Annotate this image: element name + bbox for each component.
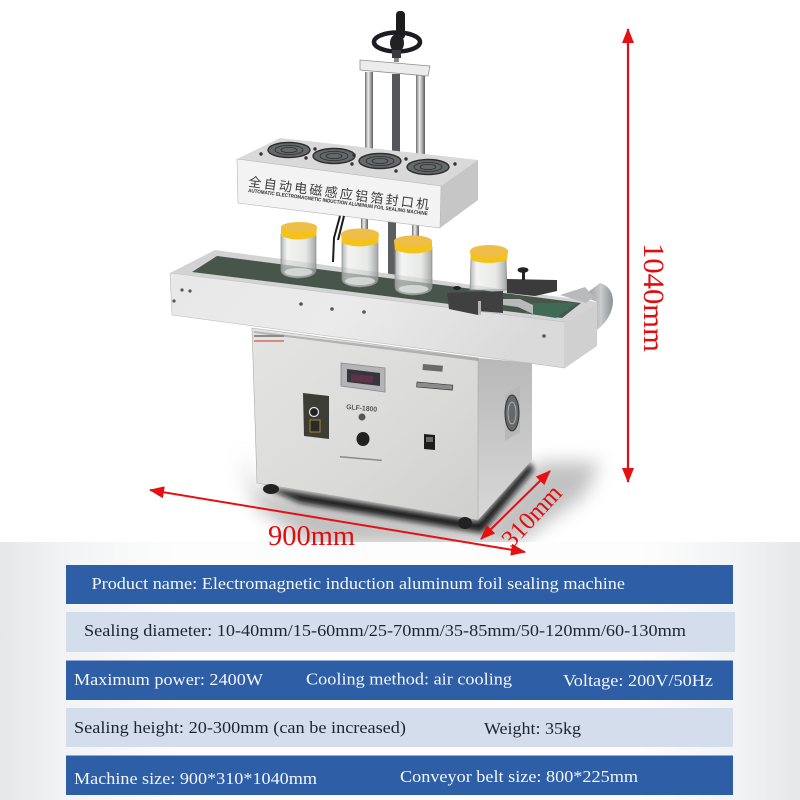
panel caption strip [340, 456, 382, 461]
model number: GLF-1800 [346, 404, 377, 414]
spec band: sealing diameter: Sealing diameter: 10-40mm/15-60mm/25-70mm/35-85mm/50-120mm/60-130mm [84, 621, 686, 640]
spec band: sealing height, weight [66, 708, 733, 747]
glass jars [281, 222, 508, 295]
speed controller panel [303, 393, 329, 439]
width dimension arrow [150, 490, 525, 552]
lower background panel [0, 542, 800, 800]
cabinet [252, 328, 532, 529]
conveyor [170, 250, 597, 368]
width dimension label: 900mm [268, 521, 355, 552]
warning labels [254, 335, 284, 342]
spec band: power, cooling, voltage: Maximum power: 2400W [74, 670, 264, 689]
spec band: power, cooling, voltage: Voltage: 200V/50Hz [563, 671, 713, 690]
side cooling fan [505, 385, 520, 441]
height dimension arrow [627, 29, 629, 482]
spec band: machine and conveyor size: Machine size: 900*310*1040mm [74, 769, 317, 788]
depth dimension arrow [481, 471, 550, 539]
digital temperature display [341, 363, 385, 392]
handwheel [374, 11, 420, 58]
spec band: power, cooling, voltage: Cooling method: air cooling [306, 670, 513, 688]
spec band: sealing height, weight: Sealing height: 20-300mm (can be increased) [74, 718, 406, 737]
jar 2 [341, 228, 379, 287]
jar 1 [281, 222, 317, 278]
cooling fans [268, 142, 449, 174]
bottle guide rails [447, 267, 557, 315]
drive motor [560, 283, 613, 330]
spec band: product name: Product name: Electromagnetic induction aluminum foil sealing machine [92, 574, 625, 593]
brand logo [422, 364, 443, 372]
rocker switch [424, 434, 435, 450]
spec band: machine and conveyor size: Conveyor belt size: 800*225mm [400, 767, 638, 786]
caster wheels [263, 484, 472, 529]
spec band: sealing diameter [66, 612, 735, 652]
head box chinese label: 全自动电磁感应铝箔封口机 [248, 174, 430, 212]
spec band: machine and conveyor size [66, 756, 733, 795]
head box english label: AUTOMATIC ELECTROMAGNETIC INDUCTION ALUMINUM FOIL SEALING MACHINE [248, 188, 428, 217]
power cable [333, 216, 340, 262]
spec band: product name [66, 565, 733, 604]
indicator knob [358, 414, 366, 420]
spec band: sealing height, weight: Weight: 35kg [484, 719, 582, 738]
height dimension label: 1040mm [637, 243, 670, 352]
depth dimension label: 310mm [497, 479, 568, 553]
jar 3 [394, 236, 432, 295]
floor shadow [240, 450, 600, 545]
jar 4 [470, 245, 508, 290]
adjustment column [360, 56, 430, 276]
brand name plate [417, 382, 453, 390]
machine photo illustration [170, 11, 613, 545]
rotary power knob [356, 432, 370, 446]
induction head box [237, 138, 478, 228]
spec band: power, cooling, voltage [66, 660, 733, 700]
